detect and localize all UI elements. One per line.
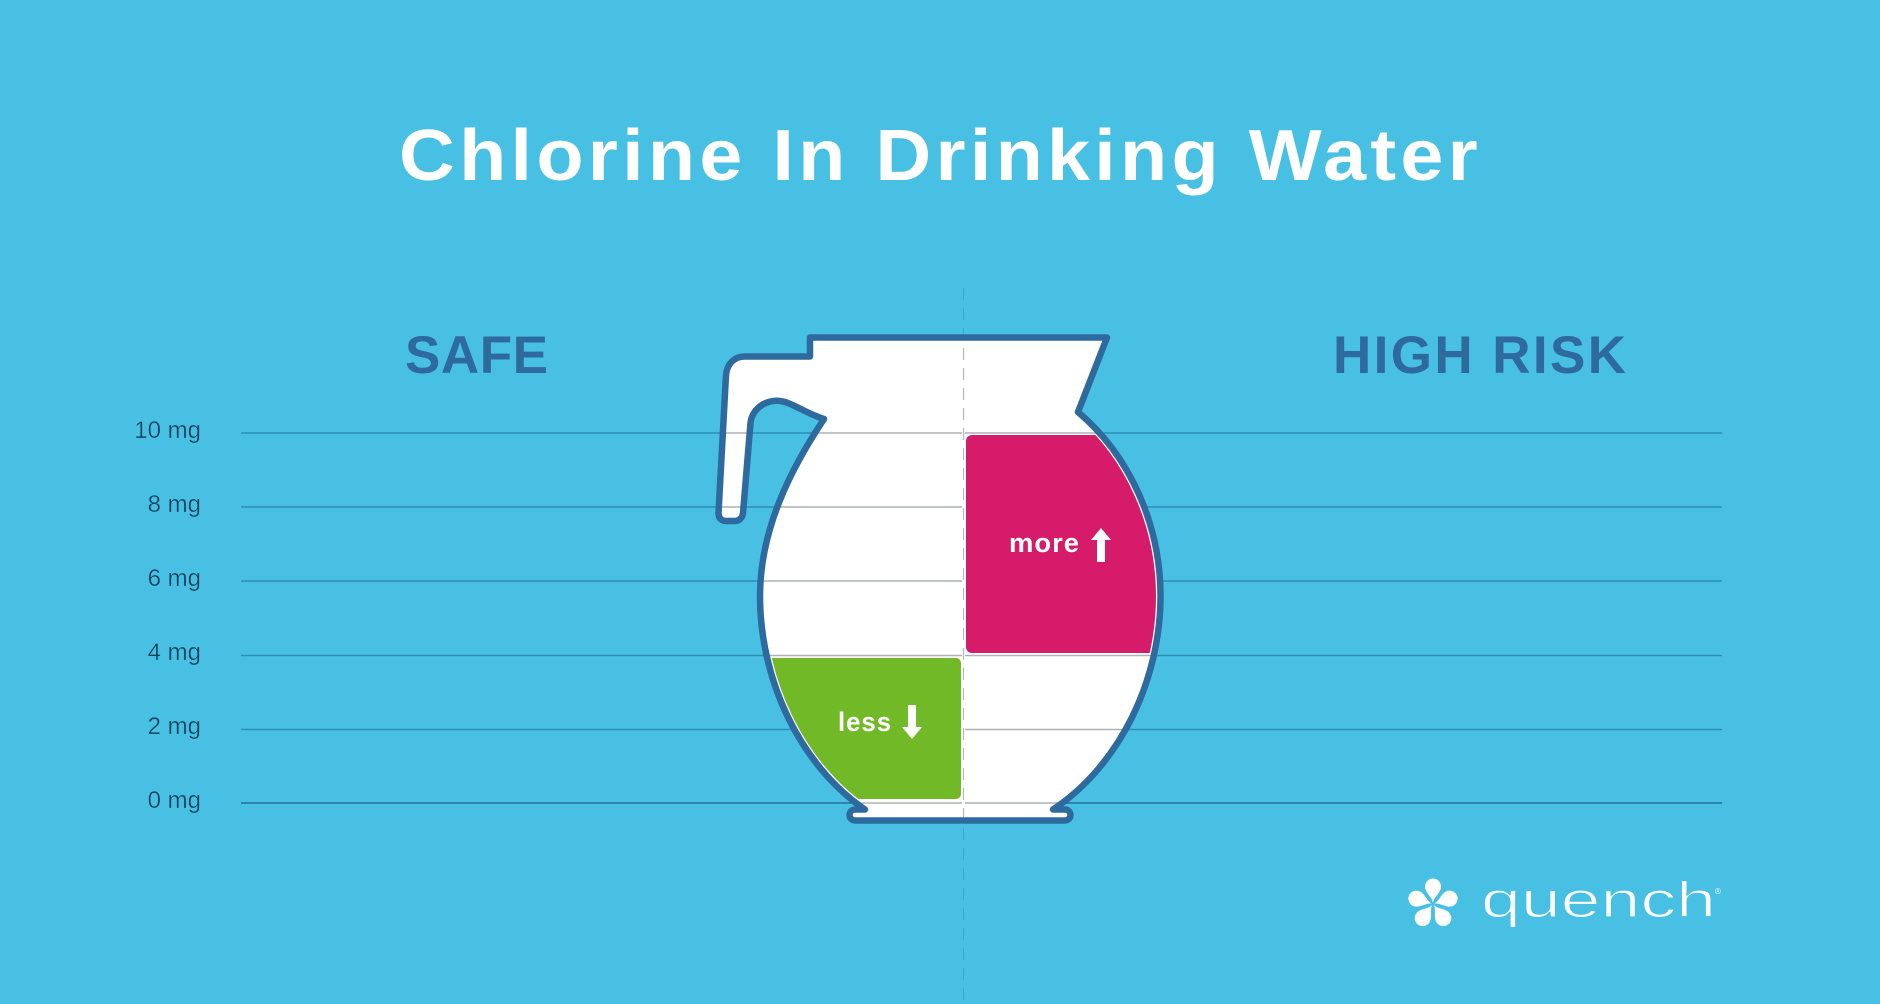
heading: high risk: HIGH RISK: [1333, 326, 1626, 385]
pitcher outline: [718, 338, 1160, 820]
logo: [1406, 872, 1721, 929]
pitcher grid lines: [722, 348, 1150, 818]
y axis labels: 2 mg: [148, 713, 201, 740]
grid lines: [241, 433, 1722, 803]
y axis labels: [134, 417, 201, 814]
label: less: less: [838, 707, 892, 737]
y axis labels: 6 mg: [148, 565, 201, 592]
y axis labels: 4 mg: [148, 639, 201, 666]
center dashed divider: [962, 288, 964, 1004]
pitcher body fill: [718, 338, 1160, 820]
logo wordmark: quench: [1481, 872, 1716, 928]
icon: down arrow: [902, 705, 922, 739]
y axis labels: 0 mg: [148, 787, 201, 814]
logo flower icon: [1406, 878, 1460, 929]
infographic canvas: [136, 128, 1722, 1000]
icon: up arrow: [1091, 528, 1111, 562]
inner white edge: [770, 435, 1158, 799]
y axis labels: 10 mg: [134, 417, 201, 444]
title: Chlorine In Drinking Water: [399, 116, 1482, 196]
high risk bar: [966, 435, 1176, 653]
registered mark: ®: [1715, 887, 1721, 896]
y axis labels: 8 mg: [148, 491, 201, 518]
safe bar: [772, 658, 961, 799]
pitcher: [715, 334, 1164, 824]
heading: safe: SAFE: [405, 326, 548, 385]
label: more: more: [1009, 528, 1080, 558]
